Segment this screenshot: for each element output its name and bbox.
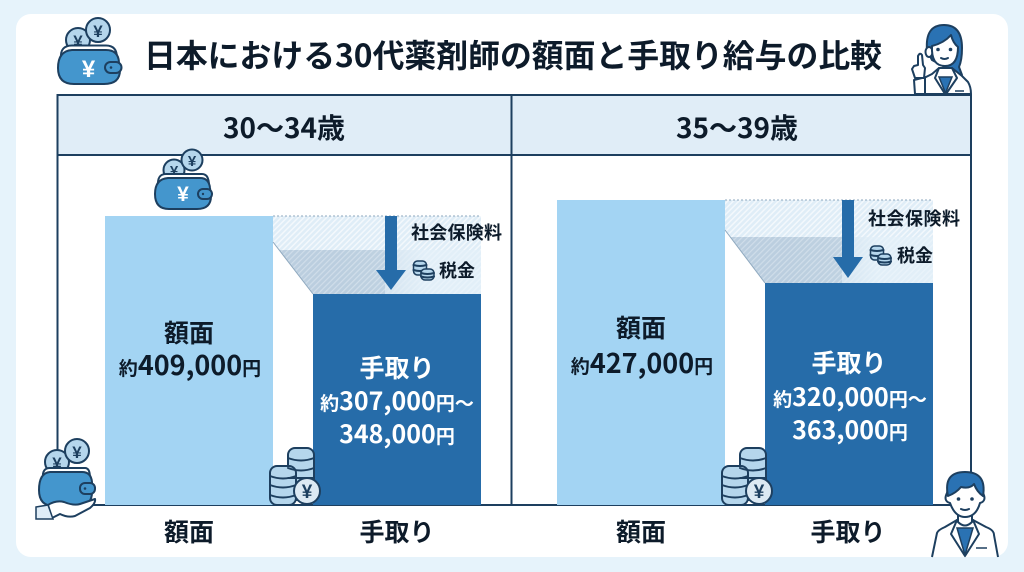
icon: coin stacks left: ¥ (302, 482, 313, 503)
icon: small coins (870, 246, 891, 265)
axis label: 手取り: 手取り (359, 513, 435, 549)
table header: 30〜34歳 (58, 96, 511, 155)
icon: title wallet: ¥ (82, 56, 96, 83)
label: 手取り amount: 363,000円 (792, 411, 908, 447)
icon: title wallet (58, 18, 122, 84)
icon: pharmacist woman pointing (912, 25, 971, 94)
label: 手取り amount: 約307,000円〜 (320, 382, 474, 418)
icon: title wallet: ¥ (73, 32, 83, 51)
panel: 30〜34歳 chart (105, 216, 502, 549)
label: 税金: 税金 (897, 242, 933, 268)
label: 額面 amount (119, 314, 261, 383)
label: 社会保険料: 社会保険料 (868, 205, 960, 231)
label: 社会保険料: 社会保険料 (411, 219, 502, 245)
icon: small coins (414, 261, 434, 280)
deduction area: 社会保険料 and 税金 (273, 216, 481, 294)
table header: 30〜34歳: 30〜34歳 (223, 107, 345, 147)
bar: 手取り (313, 294, 481, 505)
panel: 35〜39歳 chart (557, 200, 960, 549)
label: 税金: 税金 (439, 257, 475, 283)
table header: 35〜39歳: 35〜39歳 (676, 107, 798, 147)
icon: wallet above 額面 bar (155, 150, 212, 209)
label: 額面 amount: 額面 (616, 309, 666, 345)
label: 手取り amount: 348,000円 (339, 415, 455, 451)
icon: wallet on hand (30, 439, 100, 519)
icon: wallet above 額面 bar: ¥ (170, 163, 179, 180)
label: 手取り amount: 約320,000円〜 (773, 378, 927, 414)
deduction area: 社会保険料 and 税金 (725, 200, 933, 283)
icon: coin stacks right: ¥ (754, 482, 765, 503)
label: 手取り amount: 手取り (811, 344, 887, 380)
arrow: deduction (376, 216, 406, 290)
label: 手取り amount (773, 344, 927, 447)
arrow: deduction (833, 200, 863, 278)
label: 額面 amount: 約409,000円 (119, 344, 261, 383)
axis label: 額面: 額面 (616, 513, 666, 549)
icon: title wallet: ¥ (93, 22, 103, 41)
icon: coin stacks left (270, 448, 320, 505)
bar: 額面 (105, 216, 273, 505)
axis label: 額面: 額面 (164, 513, 214, 549)
label: 額面 amount: 約427,000円 (571, 342, 713, 381)
icon: wallet above 額面 bar: ¥ (188, 153, 197, 170)
axis label: 手取り: 手取り (810, 513, 886, 549)
table lines (58, 95, 971, 505)
label: 額面 amount: 額面 (164, 314, 214, 350)
label: 額面 amount (571, 309, 713, 381)
table header: 35〜39歳 (511, 96, 971, 155)
label: 手取り amount (320, 349, 474, 451)
label: 手取り amount: 手取り (359, 349, 435, 385)
icon: pharmacist man (932, 472, 998, 557)
title: 日本における30代薬剤師の額面と手取り給与の比較 (144, 31, 882, 77)
icon: wallet on hand: ¥ (72, 443, 82, 462)
icon: wallet on hand: ¥ (52, 454, 62, 473)
icon: coin stacks right (722, 448, 772, 505)
bar: 額面 (557, 200, 725, 505)
icon: wallet above 額面 bar: ¥ (177, 183, 189, 206)
bar: 手取り (765, 283, 933, 505)
